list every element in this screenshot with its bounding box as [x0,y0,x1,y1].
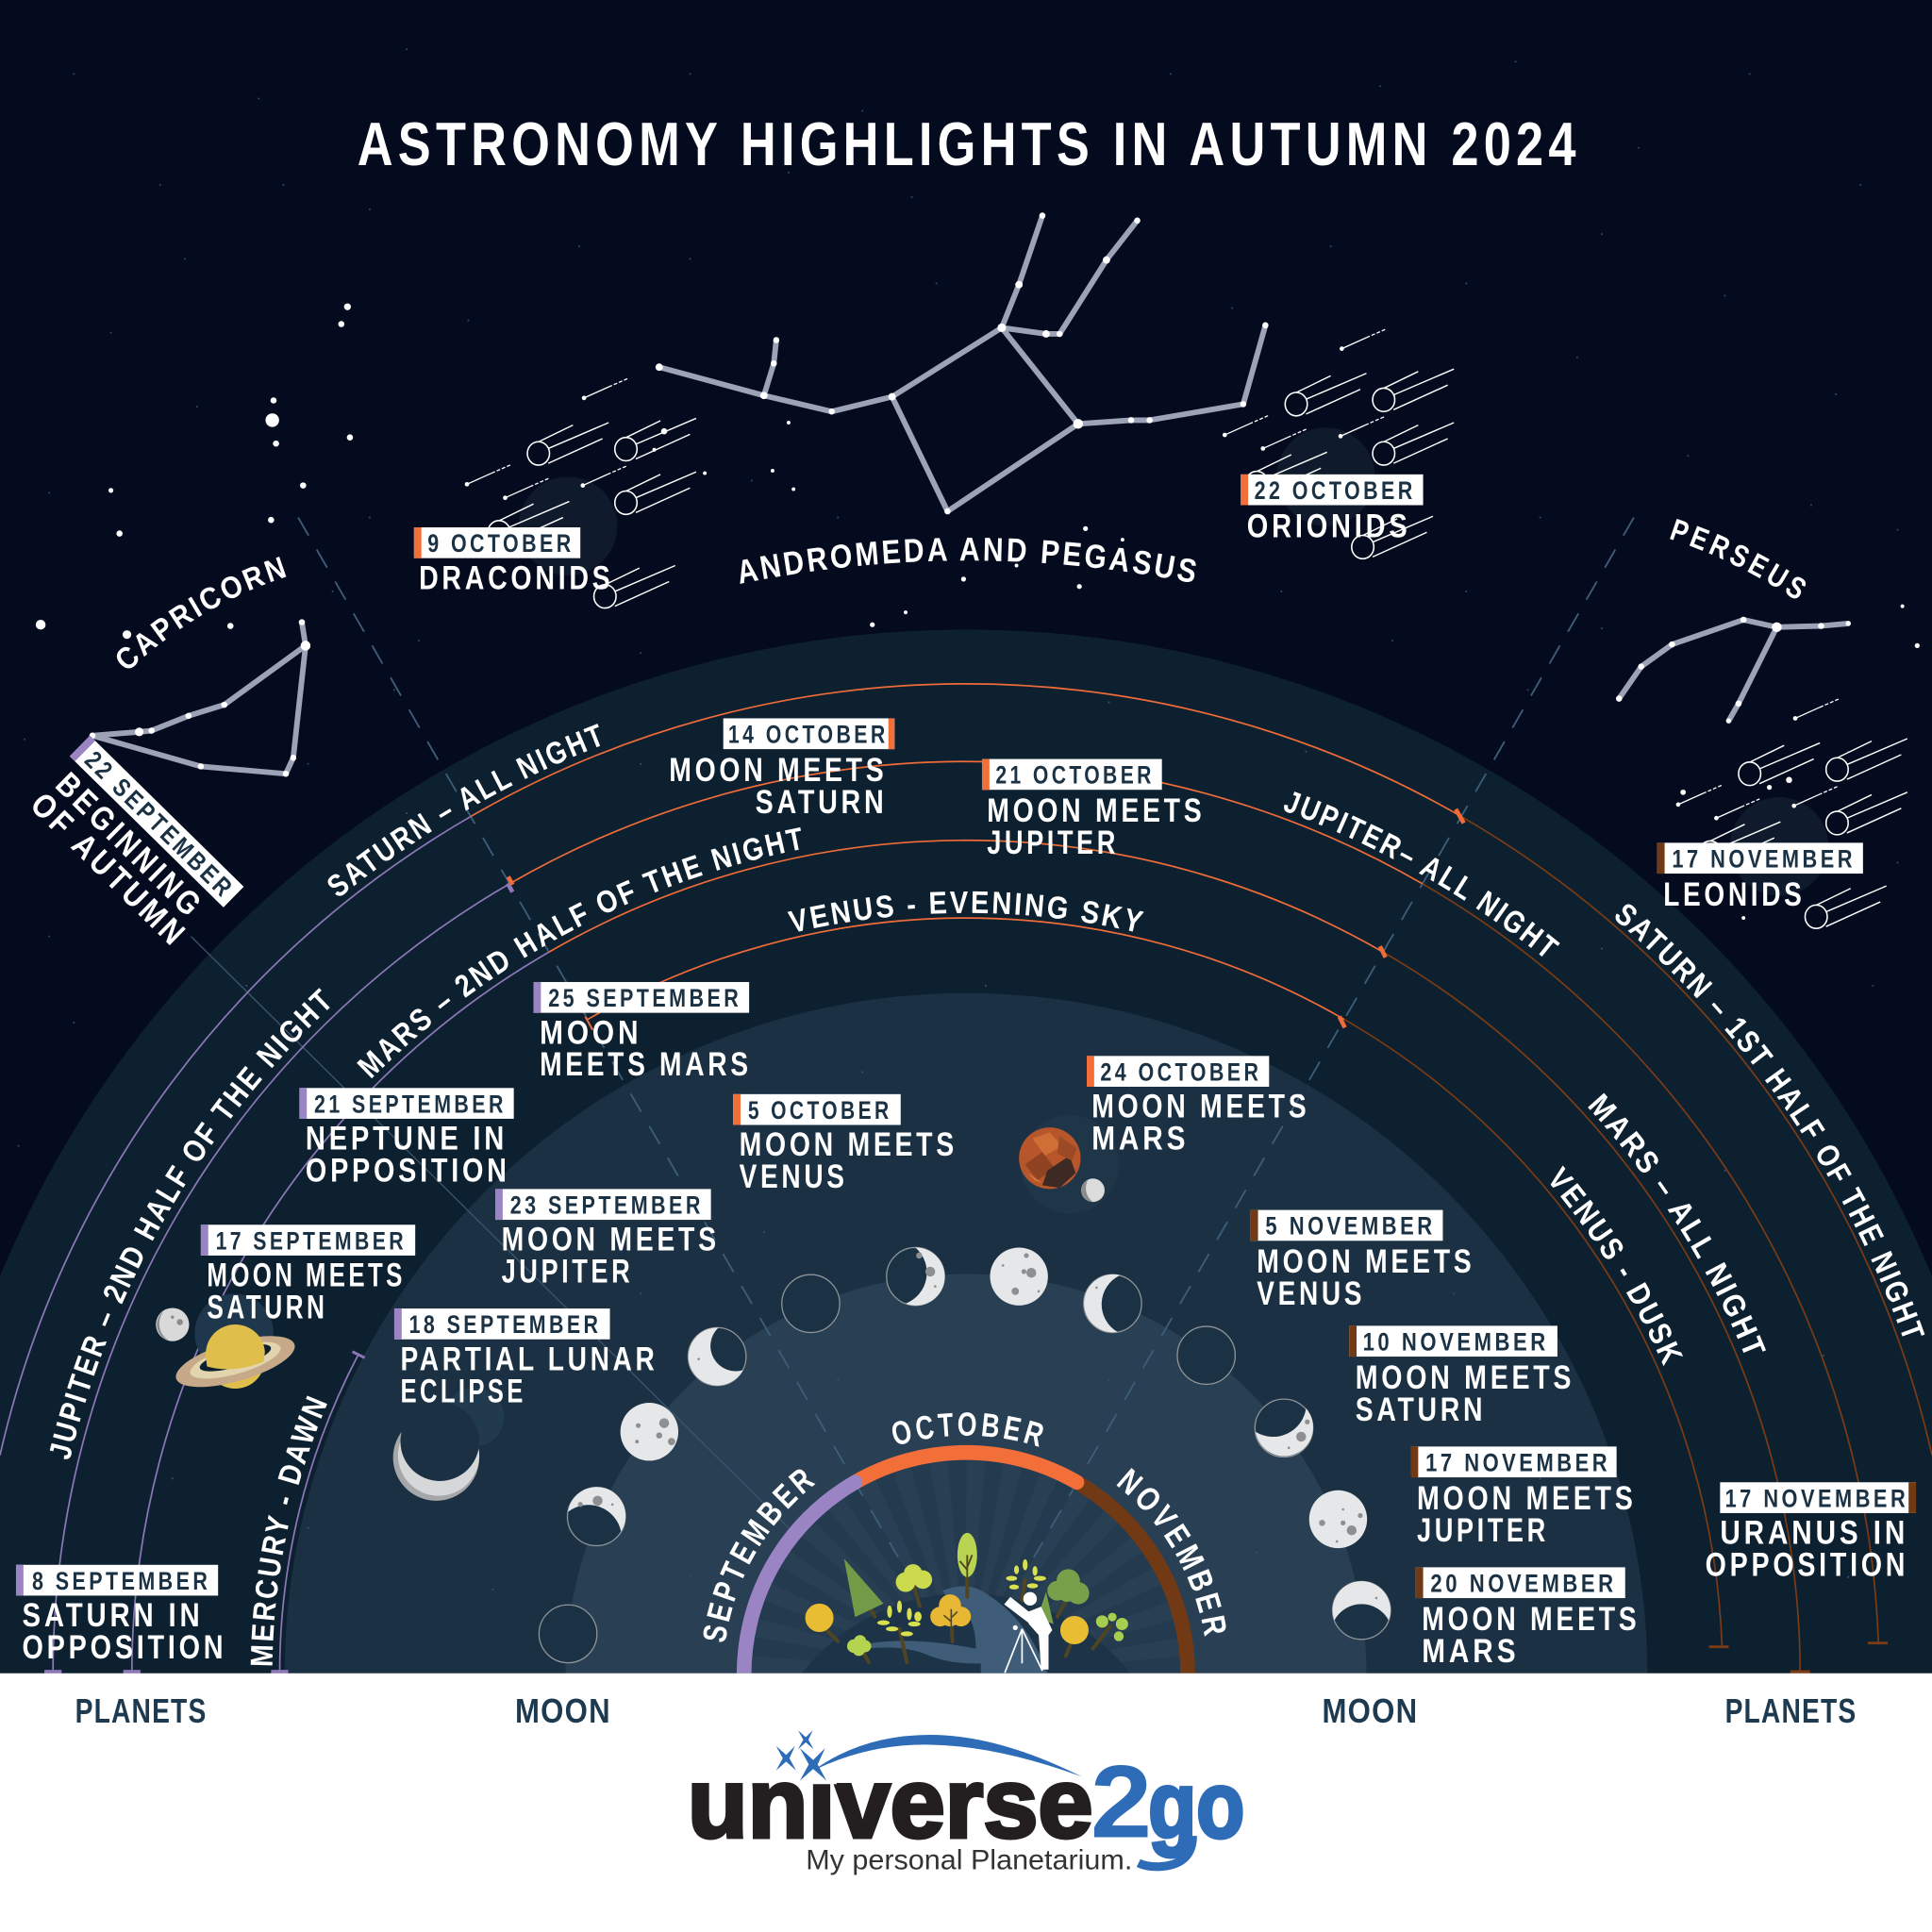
callout: 20 November Moon meets Mars: 20 NOVEMBER [1430,1570,1617,1598]
callout: 21 October Moon meets Jupiter: 21 OCTOBER [995,761,1155,790]
callout: 5 October Moon meets Venus [733,1094,958,1195]
callout: 18 September Partial lunar eclipse: ECLIPSE [400,1373,526,1409]
logo: universe2go: 2 [1091,1744,1152,1859]
tree: leafy right [1006,1559,1046,1601]
callout: 9 October Draconids: DRACONIDS [419,559,613,596]
callout: 5 November Moon meets Venus: 5 NOVEMBER [1265,1212,1436,1241]
tree: tall oval [958,1533,977,1597]
dome layers [0,629,1932,1674]
callout: 21 October Moon meets Jupiter: MOON MEETS [987,792,1205,829]
callout: 14 October Moon meets Saturn: MOON MEETS [669,752,887,789]
curved label: Mars all night: MARS – ALL NIGHT [1588,1092,1766,1353]
curved label: Saturn 1st half: SATURN – 1ST HALF OF THE NIGHT [1615,904,1924,1337]
callout: 14 October Moon meets Saturn [669,718,894,821]
meteor shower: Draconids [465,378,696,608]
curved label: Mars 2nd half: MARS – 2ND HALF OF THE NIGHT [357,827,801,1079]
callout: 5 October Moon meets Venus: 5 OCTOBER [748,1096,892,1124]
constellation: Perseus [1616,617,1851,724]
label: Perseus: PERSEUS [1670,519,1806,598]
callout: 8 September Saturn in opposition: 8 SEPTEMBER [32,1567,210,1595]
curved label: Jupiter 2nd half: JUPITER – 2ND HALF OF THE NIGHT [49,988,330,1459]
logo: universe2go: My personal Planetarium. [806,1844,1132,1875]
moon phase: full [621,1403,678,1460]
callout: 23 September Moon meets Jupiter: 23 SEPTEMBER [510,1191,704,1220]
callout: 17 September Moon meets Saturn: SATURN [207,1290,327,1326]
meteor shower: Orionids [1223,329,1454,558]
label: Capricorn: CAPRICORN [117,557,287,668]
callout: 21 September Neptune in opposition: OPPOSITION [306,1153,510,1190]
logo: universe2go: go [1148,1753,1244,1857]
callout: 23 September Moon meets Jupiter: MOON MEETS [502,1222,720,1258]
callout: 14 October Moon meets Saturn: 14 OCTOBER [728,721,889,749]
label: Andromeda and Pegasus: ANDROMEDA AND PEGASUS [740,538,1196,584]
callout: 8 September Saturn in opposition: OPPOSITION [23,1629,226,1666]
callout: 5 October Moon meets Venus: VENUS [740,1158,848,1195]
callout: 21 September Neptune in opposition: NEPTUNE IN [306,1121,508,1158]
hill [801,1593,1131,1674]
callout: 17 September Moon meets Saturn: MOON MEETS [207,1257,406,1294]
callout: 25 September Moon meets Mars: MEETS MARS [540,1046,752,1083]
moon phase: top lit [567,1487,625,1546]
constellation: Capricorn [90,619,310,777]
tree: conifer [844,1558,883,1617]
callout: 8 September Saturn in opposition: SATURN IN [23,1597,204,1634]
callout: 24 October Moon meets Mars: MARS [1091,1121,1189,1158]
callout: 20 November Moon meets Mars: MOON MEETS [1422,1601,1640,1638]
tree: gold round right [1060,1616,1089,1656]
curved label: Venus evening sky: VENUS - EVENING SKY [787,891,1144,932]
callout: 23 September Moon meets Jupiter: JUPITER [502,1254,633,1291]
month label: September: SEPTEMBER [704,1470,815,1642]
footer label: moon right: MOON [1322,1691,1418,1730]
callout: 5 October Moon meets Venus: MOON MEETS [740,1126,958,1163]
callout: 17 November Leonids: LEONIDS [1663,876,1805,913]
moon phase: new moon 1 [539,1605,597,1663]
Mercury arc [279,1354,358,1674]
illustration: Mars and moon [1019,1115,1119,1214]
tree: leafy left [877,1601,922,1662]
callout: 22 September beginning of autumn: BEGINNING [48,766,210,925]
astronomer with telescope [1004,1592,1052,1673]
tree: gold round left [806,1604,838,1641]
callout: 22 September beginning of autumn: OF AUTUMN [24,786,194,955]
callout: 17 September Moon meets Saturn [201,1224,415,1326]
solid radial line: start of autumn [191,937,789,1528]
callout: 17 November Moon meets Jupiter: MOON MEETS [1417,1480,1637,1517]
tree: green dots [1093,1613,1128,1649]
callout: 21 October Moon meets Jupiter: JUPITER [987,824,1119,861]
moon phase: new moon 2 [782,1274,840,1333]
callout: 18 September Partial lunar eclipse [394,1308,658,1409]
callout: 22 October Orionids: 22 OCTOBER [1255,476,1416,505]
callout: 24 October Moon meets Mars: MOON MEETS [1091,1089,1309,1125]
callout: 24 October Moon meets Mars [1087,1056,1309,1158]
moon phase: full 2 [990,1247,1048,1306]
callout: 25 September Moon meets Mars [534,982,752,1083]
callout: 22 September beginning of autumn: 22 SEPTEMBER [79,745,240,904]
Jupiter arc [53,761,1878,1674]
callout: 10 November Moon meets Saturn [1349,1325,1574,1428]
callout: 20 November Moon meets Mars [1416,1567,1640,1670]
callout: 21 October Moon meets Jupiter [982,759,1205,861]
callout: 18 September Partial lunar eclipse: 18 SEPTEMBER [409,1310,601,1339]
curved label: Venus dusk: VENUS - DUSK [1551,1166,1683,1366]
Mars arc [132,841,1800,1674]
callout: 17 September Moon meets Saturn: 17 SEPTEMBER [216,1226,407,1255]
callout: 22 October Orionids [1241,475,1424,544]
illustration: partial lunar eclipse [393,1388,504,1501]
meteor shower: Leonids [1676,699,1907,928]
logo: universe2go: universe [688,1748,1093,1858]
tree: light green [896,1564,932,1607]
callout: 17 November Moon meets Jupiter [1411,1446,1637,1549]
curved label: Jupiter all night: JUPITER– ALL NIGHT [1284,791,1560,957]
month label: November: NOVEMBER [1117,1468,1226,1637]
tree: small lime [847,1635,871,1662]
callout: 14 October Moon meets Saturn: SATURN [756,784,887,821]
callout: 17 November Leonids [1657,842,1863,913]
central landscape [801,1533,1131,1674]
month ring [744,1453,1188,1683]
callout: 18 September Partial lunar eclipse: PARTIAL LUNAR [400,1341,658,1377]
callout: 25 September Moon meets Mars: MOON [540,1014,641,1051]
moon phase: lower right crescent [1255,1399,1313,1457]
callout: 5 November Moon meets Venus [1251,1210,1474,1312]
callout: 9 October Draconids: 9 OCTOBER [427,529,575,558]
moon phase: right crescent [887,1247,944,1306]
callout: 17 November Uranus in opposition [1706,1482,1916,1584]
callout: 24 October Moon meets Mars: 24 OCTOBER [1100,1058,1261,1086]
Venus arc [588,918,1722,1646]
callout: 22 September beginning of autumn [19,736,243,958]
dashed radial sector lines [298,518,1634,1557]
illustration: Saturn and Moon [156,1293,300,1397]
callout: 21 September Neptune in opposition: 21 SEPTEMBER [314,1090,507,1118]
callout: 17 November Moon meets Jupiter: JUPITER [1417,1512,1549,1549]
callout: 10 November Moon meets Saturn: SATURN [1356,1391,1486,1428]
footer label: planets left: PLANETS [75,1691,207,1730]
callout: 9 October Draconids [414,527,613,596]
callout: 17 November Leonids: 17 NOVEMBER [1672,845,1856,874]
bright stars [36,304,1920,920]
logo: universe2go [688,1730,1244,1875]
callout: 17 November Moon meets Jupiter: 17 NOVEMBER [1425,1449,1610,1477]
Saturn arc [0,684,1932,1456]
footer label: planets right: PLANETS [1725,1691,1857,1730]
callout: 10 November Moon meets Saturn: 10 NOVEMBER [1363,1328,1549,1357]
moon phase: left crescent [1084,1274,1141,1333]
callout: 5 November Moon meets Venus: VENUS [1257,1275,1365,1312]
footer label: moon left: MOON [515,1691,611,1730]
callout: 23 September Moon meets Jupiter [495,1189,720,1291]
callout: 8 September Saturn in opposition [16,1565,226,1666]
tree: green right [1047,1569,1090,1617]
moon phase: top lit 2 [1333,1581,1391,1640]
title: ASTRONOMY HIGHLIGHTS IN AUTUMN 2024 [358,109,1581,178]
callout: 21 September Neptune in opposition [299,1088,514,1190]
river [868,1587,1047,1674]
moon phase: crescent lower left [688,1327,746,1386]
moon phase: full 3 [1309,1491,1367,1548]
curved label: Mercury dawn: MERCURY - DAWN [251,1396,327,1666]
arc end ticks [44,809,1888,1672]
tree: gold three-lobed [930,1594,971,1641]
tree: small cone [1041,1592,1054,1624]
callout: 20 November Moon meets Mars: MARS [1422,1633,1519,1670]
white footer panel [0,1674,1932,1932]
curved label: Saturn all night: SATURN – ALL NIGHT [328,724,600,896]
constellation: Andromeda and Pegasus [656,212,1269,514]
callout: 5 November Moon meets Venus: MOON MEETS [1257,1243,1474,1280]
moon phase: new moon 3 [1177,1326,1235,1384]
callout: 22 October Orionids: ORIONIDS [1247,508,1411,544]
month label: October: OCTOBER [892,1412,1043,1447]
faint background stars [19,49,1897,1146]
callout: 25 September Moon meets Mars: 25 SEPTEMBER [548,984,741,1012]
planet visibility arcs [0,684,1932,1674]
callout: 10 November Moon meets Saturn: MOON MEETS [1356,1359,1574,1396]
